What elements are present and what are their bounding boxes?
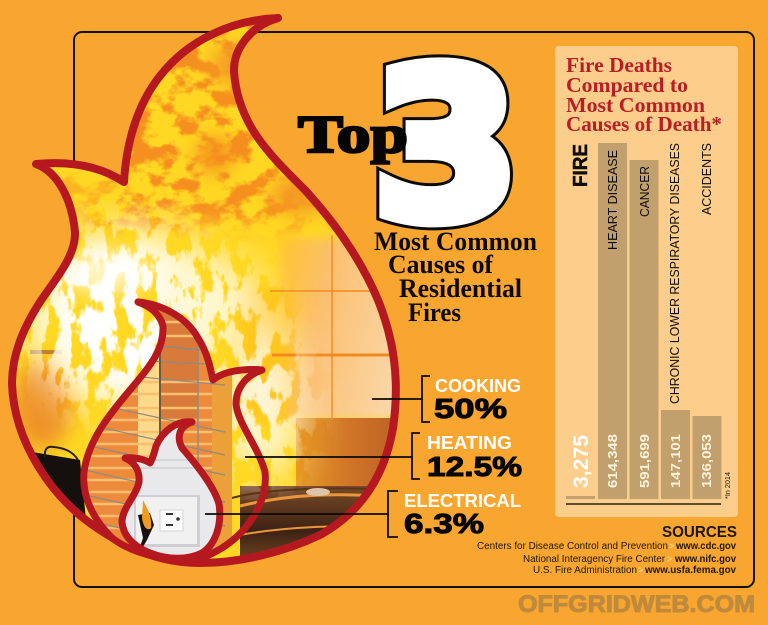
bar chart: 591,699 — [637, 434, 652, 488]
subtitle — [374, 227, 538, 327]
chart heading: Fire Deaths — [566, 53, 672, 77]
bar chart: CHRONIC LOWER RESPIRATORY DISEASES — [667, 143, 682, 404]
sources: www.nifc.gov — [674, 554, 736, 565]
bar chart: 614,348 — [605, 434, 620, 488]
callout: electrical — [205, 491, 521, 539]
website watermark: OFFGRIDWEB.COM — [518, 591, 755, 618]
chart heading: Causes of Death* — [566, 112, 722, 136]
sources: SOURCES — [662, 524, 737, 541]
bar chart: HEART DISEASE — [605, 150, 620, 250]
subtitle: Causes of — [388, 250, 493, 279]
subtitle: Fires — [408, 298, 461, 327]
callout: cooking: COOKING — [435, 376, 521, 396]
small flame with burning outlet photo — [118, 418, 224, 558]
panel: fire deaths chart — [555, 46, 738, 517]
bar chart — [566, 143, 732, 504]
middle flame with heater photo — [70, 295, 265, 570]
sources: National Interagency Fire Center — [523, 554, 666, 565]
callout: electrical: 6.3% — [404, 508, 484, 539]
title: Top 3 — [298, 28, 519, 266]
chart heading: Compared to — [566, 73, 688, 97]
bar chart: 147,101 — [668, 434, 683, 488]
large flame with kitchen fire photo — [8, 14, 400, 567]
frame — [74, 32, 754, 587]
numeral 3: 3 — [373, 28, 519, 266]
callout: electrical: ELECTRICAL — [404, 491, 521, 511]
subtitle: Residential — [399, 274, 522, 303]
callout: heating — [245, 433, 522, 482]
sources: > — [667, 554, 672, 564]
callout: cooking — [372, 376, 521, 424]
bar chart: CANCER — [637, 166, 652, 217]
callout: heating: HEATING — [427, 433, 512, 453]
sources: > — [638, 565, 643, 575]
callout: cooking: 50% — [434, 393, 507, 424]
subtitle: Most Common — [374, 227, 538, 256]
chart heading: Most Common — [566, 93, 705, 117]
bar chart: 136,053 — [699, 434, 714, 488]
chart heading — [566, 53, 722, 136]
sources: www.usfa.fema.gov — [644, 565, 736, 576]
sources: > — [669, 541, 674, 551]
bar chart: 3,275 — [570, 435, 593, 488]
callout: heating: 12.5% — [427, 451, 522, 482]
bar chart: ACCIDENTS — [699, 143, 714, 215]
bar chart: FIRE — [570, 144, 592, 187]
word Top: Top — [298, 106, 408, 164]
sources — [477, 524, 737, 576]
numeral 3: 3 — [373, 28, 519, 266]
sources: U.S. Fire Administration — [533, 565, 637, 576]
footnote: *In 2014 — [723, 472, 732, 499]
sources: Centers for Disease Control and Prevention — [477, 541, 668, 552]
sources: www.cdc.gov — [675, 541, 736, 552]
